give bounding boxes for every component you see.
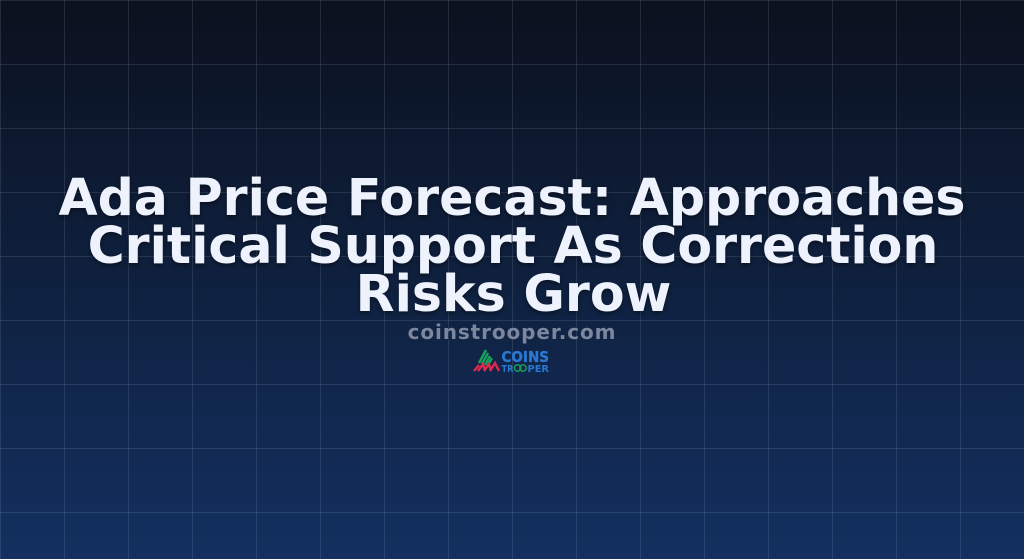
- title: Critical Support As Correction: [88, 216, 938, 275]
- title: [58, 168, 966, 323]
- title: Risks Grow: [356, 264, 671, 323]
- website label: coinstrooper.com: [408, 320, 616, 344]
- logo wordmark: TR: [502, 364, 514, 375]
- logo wordmark: PER: [528, 364, 549, 375]
- logo: Coins Trooper: [473, 348, 549, 375]
- logo wordmark: [502, 348, 549, 375]
- icon: green and red chart mountain: [474, 350, 499, 371]
- title: Ada Price Forecast: Approaches: [58, 168, 966, 227]
